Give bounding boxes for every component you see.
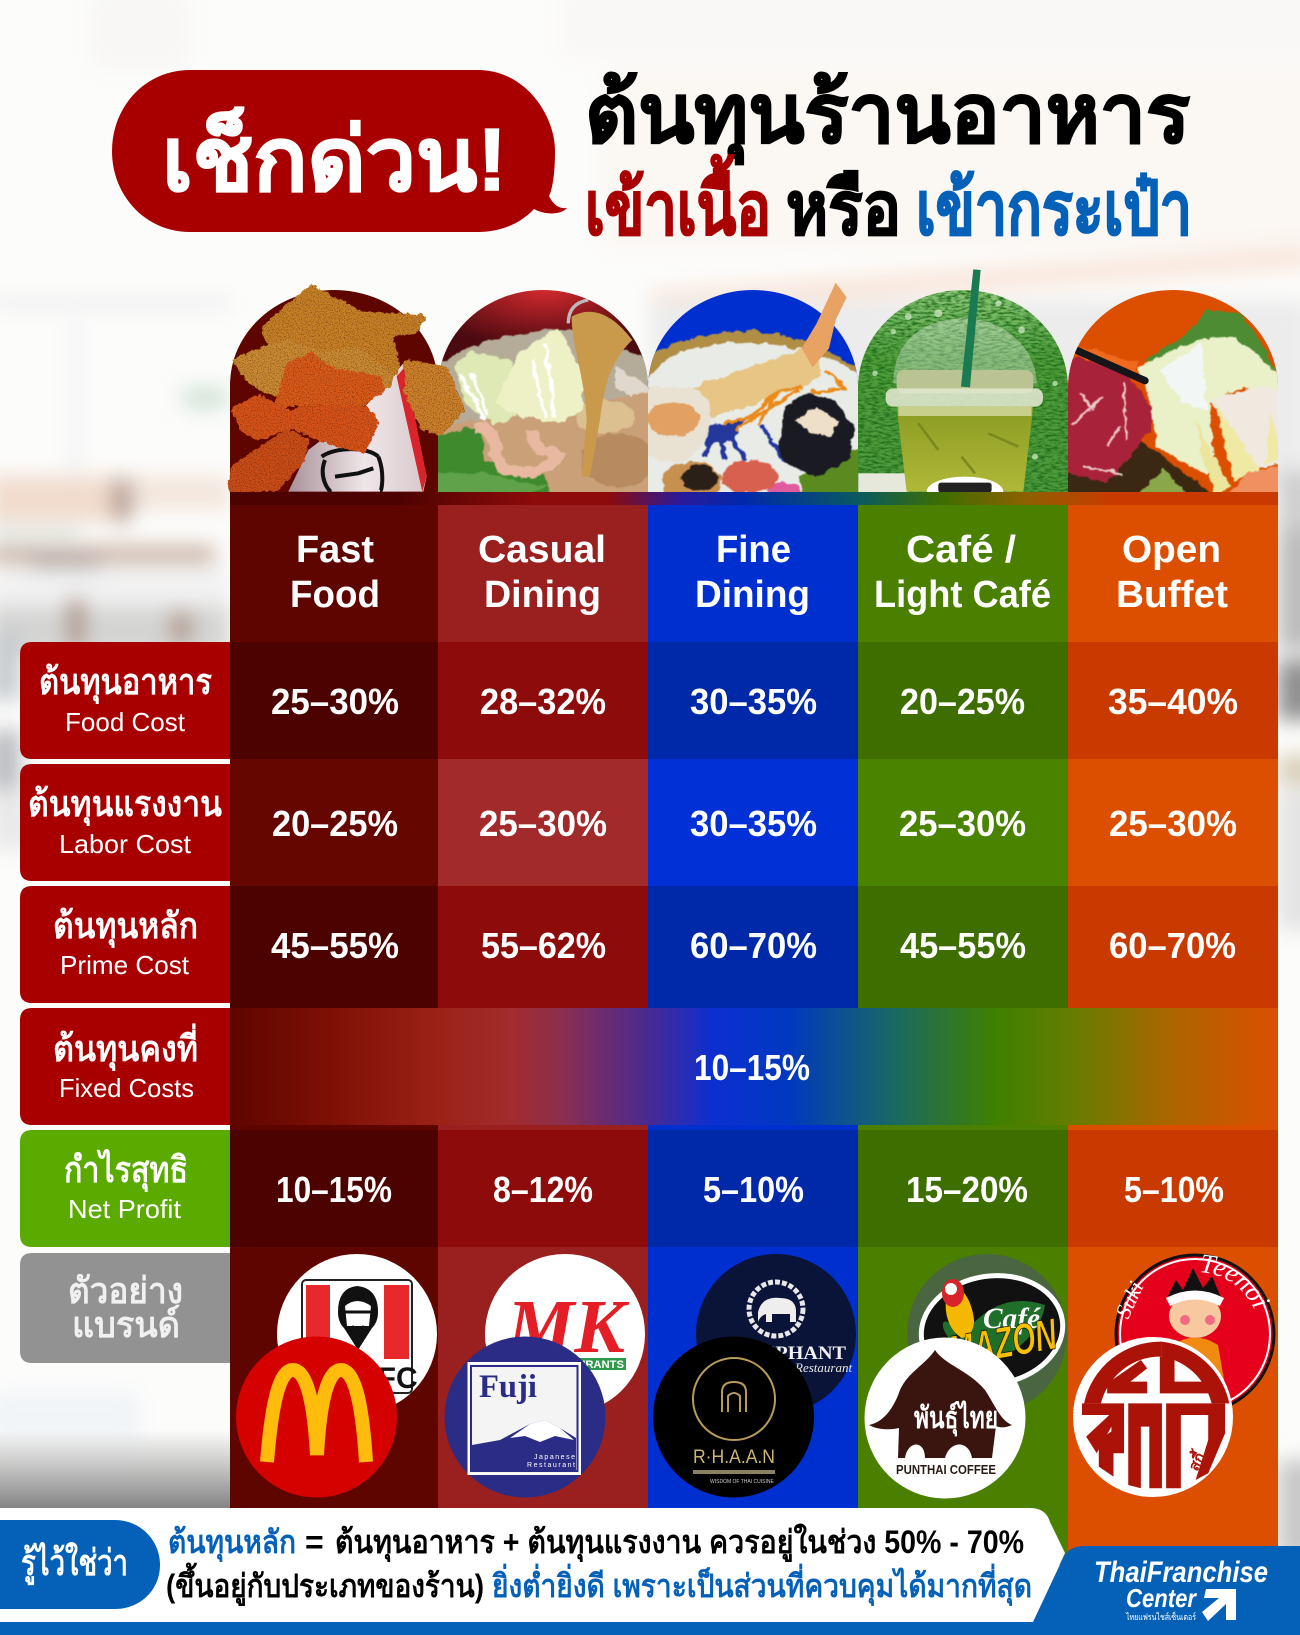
logo: Punthai Coffee: PUNTHAI COFFEE [896,1462,996,1477]
footer note text: ยิ่งต่ำยิ่งดี เพราะเป็นส่วนที่ควบคุมได้มากที่สุด [492,1563,1032,1607]
column: Fast Food: 20–25% [272,803,398,844]
logo: Suki Teenoi: Teenoi [1201,1254,1270,1309]
row label: brand examples: ตัวอย่าง [68,1270,183,1311]
title line 2 [585,154,1192,250]
column: Fine Dining: 60–70% [690,925,817,966]
column: Casual Dining: Casual [478,529,606,571]
column: Fast Food [230,505,438,1508]
logo: R-Haan: WISDOM OF THAI CUISINE [710,1479,774,1485]
logo: Cafe Amazon: Café [983,1302,1042,1335]
column: Fine Dining: 30–35% [690,803,817,844]
logo: MK Restaurants: RESTAURANTS [540,1359,624,1371]
logo: Fuji [444,1336,606,1498]
logo: McDonald's [236,1336,397,1498]
column: Fast Food: Food [290,574,380,616]
column: Open Buffet: Open [1122,529,1221,571]
column: Casual Dining [438,505,648,1508]
row label: Food Cost: Food Cost [65,707,186,737]
column: Café / Light Café: 45–55% [900,925,1026,966]
footer pill: รู้ไว้ใช่ว่า: รู้ไว้ใช่ว่า [21,1541,128,1586]
logo: Suki Teenoi [1110,1254,1276,1406]
net profit values [276,1169,1224,1210]
logo: ThaiFranchise Center [1094,1556,1268,1622]
row label: Food Cost [20,642,230,759]
logo: Blue Elephant: Restaurant [794,1360,852,1375]
column: Fine Dining: Fine [716,529,791,571]
title line 1: ต้นทุนร้านอาหาร [585,69,1190,165]
cost table columns [230,492,1278,1565]
footer blue logo panel and bar [0,1546,1300,1635]
footer white panel [0,1508,1065,1622]
logo: Fuji: Japanese [534,1454,575,1461]
photo: iced green tea [857,269,1070,507]
gradient band under photos [230,492,1278,505]
logo: Suki Teenoi: Suki [1110,1277,1149,1322]
logo: ThaiFranchise Center: ThaiFranchise [1094,1556,1268,1589]
column: Open Buffet: 25–30% [1109,803,1237,844]
footer pill: รู้ไว้ใช่ว่า [0,1520,160,1609]
column: Café / Light Café: Café / [906,529,1016,571]
row label: Net Profit: กำไรสุทธิ [64,1148,188,1193]
logo: Cafe Amazon: AMAZON [923,1309,1061,1381]
footer note text: ต้นทุนหลัก [168,1524,296,1563]
row label: Prime Cost [20,886,230,1003]
net profit values: 8–12% [493,1169,593,1210]
logo: R-Haan: R·H.A.A.N [693,1447,775,1468]
column: Fast Food: 25–30% [271,681,399,722]
logo: Punthai Coffee: พันธุ์ไทย [914,1400,998,1437]
column: Fast Food: 45–55% [271,925,399,966]
logo: Cafe Amazon [907,1254,1070,1414]
logo: MK Restaurants: MK [506,1285,629,1369]
row label: Fixed Costs: ต้นทุนคงที่ [53,1023,198,1072]
title line 2: เข้าเนื้อ [585,154,771,250]
column: Open Buffet: Buffet [1116,574,1228,616]
column: Casual Dining: 28–32% [480,681,606,722]
row label: Labor Cost: ต้นทุนแรงงาน [28,783,222,827]
speech bubble: เช็กด่วน! [112,70,567,232]
column: Casual Dining: 55–62% [481,925,606,966]
row label: Net Profit: Net Profit [68,1194,182,1224]
column: Café / Light Café [858,505,1068,1565]
logo: Fuji: Fuji [479,1369,537,1405]
net profit values: 10–15% [276,1169,392,1210]
row label: Net Profit [20,1130,230,1247]
column: Café / Light Café: Light Café [874,574,1051,616]
logo: Suki Kee (สุกี้): สุกี้ [1182,1447,1211,1474]
photo: fine dining plate [645,283,862,502]
fixed cost gradient row: 10–15%: 10–15% [694,1047,810,1088]
title line 2: เข้ากระเป๋า [916,167,1192,250]
title line 2: หรือ [786,167,901,250]
logo: MK Restaurants [485,1254,645,1414]
row label: Labor Cost [20,764,230,881]
logo: Fuji: Restaurant [527,1462,575,1469]
row label: Labor Cost: Labor Cost [59,829,192,859]
footer note text: ต้นทุนอาหาร + ต้นทุนแรงงาน ควรอยู่ในช่วง 50% - 70% [335,1523,1024,1563]
logo: ThaiFranchise Center: ไทยแฟรนไชส์เซ็นเตอร์ [1125,1610,1196,1622]
logo: KFC [277,1254,437,1414]
column: Fine Dining: 30–35% [690,681,817,722]
column: Fast Food: Fast [296,529,374,571]
icon: arrow [1202,1589,1236,1621]
footer note text [166,1523,1032,1607]
speech bubble: เช็กด่วน!: เช็กด่วน! [162,106,507,209]
column: Fine Dining [648,505,858,1508]
column: Café / Light Café: 25–30% [899,803,1026,844]
column: Open Buffet: 35–40% [1108,681,1238,722]
column: Open Buffet: 60–70% [1109,925,1236,966]
photo: hot pot with soup [435,288,655,497]
row label: Fixed Costs [20,1008,230,1125]
photo: buffet ingredients [1063,288,1283,497]
logo: Blue Elephant: ELEPHANT [735,1343,846,1364]
column: Casual Dining: Dining [484,574,601,616]
logo: Punthai Coffee [864,1338,1026,1498]
row label: Prime Cost: Prime Cost [60,950,190,980]
column: Casual Dining: 25–30% [479,803,607,844]
logo: R-Haan [653,1336,814,1498]
net profit values: 5–10% [703,1169,804,1210]
row label: Prime Cost: ต้นทุนหลัก [53,905,198,949]
footer note text: = [305,1524,324,1560]
row label: Fixed Costs: Fixed Costs [59,1073,194,1103]
logo: Blue Elephant [696,1254,856,1414]
logo: ThaiFranchise Center: Center [1126,1583,1198,1613]
row label: Food Cost: ต้นทุนอาหาร [39,661,213,705]
photo: fried chicken bucket [230,288,461,492]
row label: brand examples [20,1253,230,1363]
net profit values: 15–20% [906,1169,1028,1210]
column: Café / Light Café: 20–25% [900,681,1025,722]
fixed cost gradient row: 10–15% [230,1008,1278,1125]
logo: KFC: KFC [356,1362,418,1395]
row label: brand examples: แบรนด์ [72,1304,180,1345]
net profit values: 5–10% [1124,1169,1224,1210]
logo: Suki Kee (สุกี้) [1073,1337,1233,1497]
footer note text: (ขึ้นอยู่กับประเภทของร้าน) [166,1562,484,1607]
column: Open Buffet [1068,505,1278,1565]
column: Fine Dining: Dining [695,574,810,616]
